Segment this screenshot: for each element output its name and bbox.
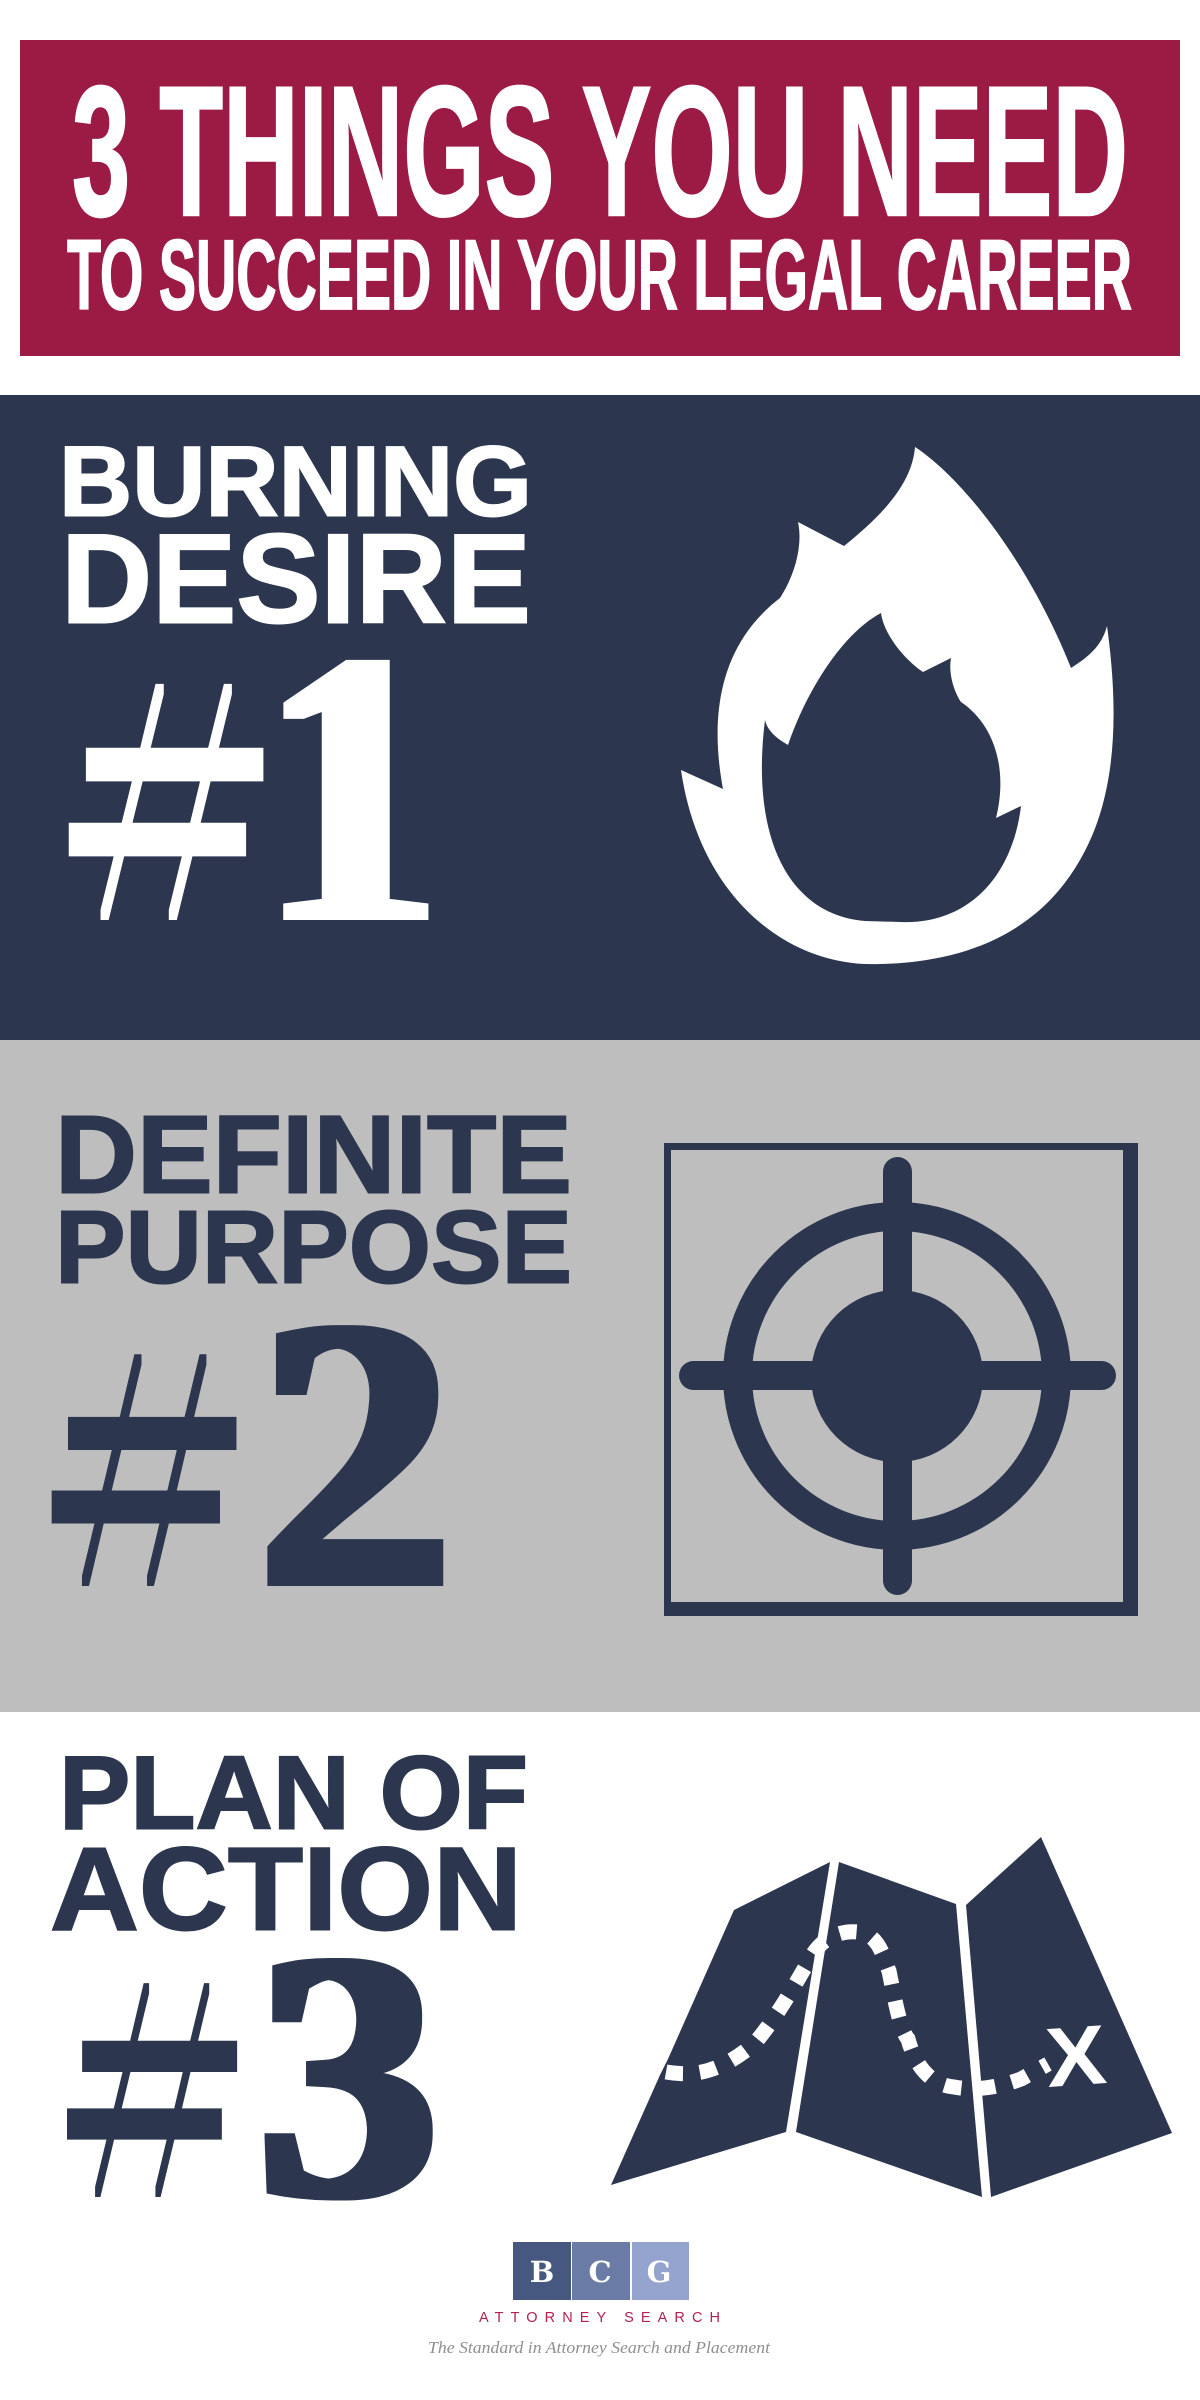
logo square C: C: [588, 2255, 612, 2289]
number 3: #: [38, 1928, 266, 2259]
dotted route: [666, 1932, 1048, 2089]
heading: definite purpose: PURPOSE: [55, 1190, 572, 1304]
route destination X: X: [1043, 2007, 1109, 2105]
heading: plan of action: [50, 1736, 528, 1956]
number 3: 3: [258, 1879, 438, 2272]
heading: burning desire: DESIRE: [61, 508, 531, 650]
heading: burning desire: [59, 426, 532, 650]
icon: flame: [681, 447, 1114, 964]
number 1: [37, 570, 436, 1006]
tagline: The Standard in Attorney Search and Placement: [428, 2338, 770, 2357]
logo square B: B: [530, 2255, 554, 2289]
icon: target: [664, 1143, 1138, 1616]
logo square B: [513, 2242, 571, 2300]
logo: BCG Attorney Search: [428, 2242, 770, 2357]
title banner: [20, 40, 1180, 356]
number 1: #: [37, 624, 295, 990]
number 2: #: [21, 1294, 267, 1654]
panel: plan of action: [38, 1736, 1172, 2272]
logo square C: [572, 2242, 630, 2300]
panel: burning desire: [0, 395, 1200, 1040]
number 2: 2: [258, 1238, 453, 1668]
number 2: [21, 1238, 453, 1668]
heading: plan of action: PLAN OF: [59, 1736, 528, 1852]
panel: definite purpose: [0, 1040, 1200, 1712]
number 3: [38, 1879, 438, 2272]
heading: definite purpose: [55, 1094, 572, 1304]
heading: plan of action: ACTION: [50, 1824, 522, 1956]
logo square G: [632, 2242, 689, 2300]
logo wordmark: ATTORNEY SEARCH: [479, 2310, 720, 2326]
number 1: 1: [266, 570, 436, 1006]
icon: treasure map: [611, 1837, 1172, 2197]
heading: burning desire: BURNING: [59, 426, 532, 536]
logo square G: G: [647, 2255, 671, 2289]
heading: definite purpose: DEFINITE: [55, 1094, 572, 1216]
